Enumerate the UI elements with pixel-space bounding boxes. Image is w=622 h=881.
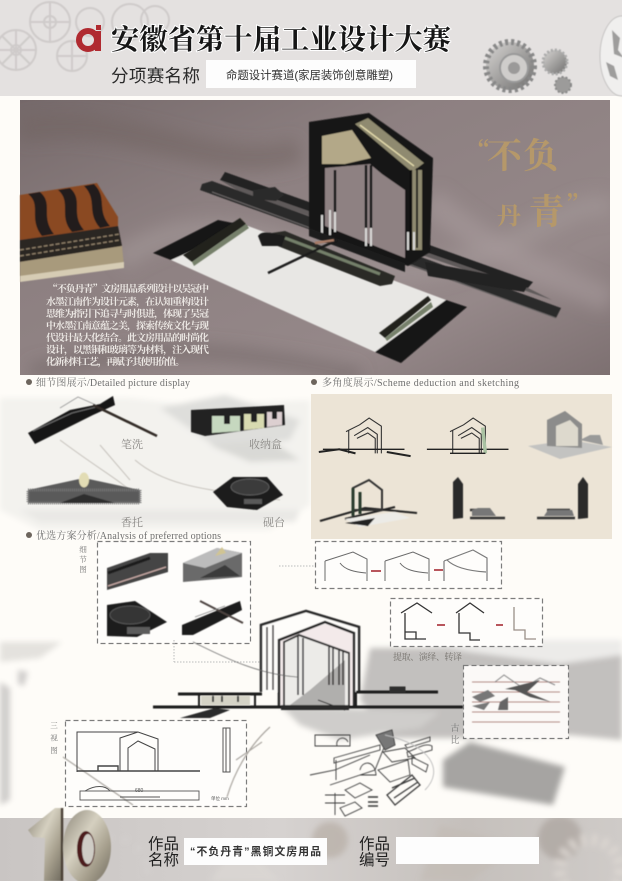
plum branch decoration xyxy=(63,727,270,805)
view 6 side xyxy=(537,477,588,519)
product description text: 代设计最大化结合。此文房用品的时尚化 xyxy=(46,330,209,344)
label: storage box: 收纳盒 xyxy=(249,436,282,452)
view 3 perspective xyxy=(528,411,612,459)
logo xyxy=(79,25,101,51)
label: detail views: 节 xyxy=(79,554,87,565)
roof sketch 2 xyxy=(385,552,429,581)
hand sketches xyxy=(310,730,434,816)
unit note: 单位 mm xyxy=(211,795,229,802)
panel: detail pictures xyxy=(0,395,310,530)
decorative gears top right xyxy=(486,16,622,96)
product: storage box xyxy=(191,405,285,436)
arrow 2 xyxy=(434,569,443,571)
heading: preferred options: 优选方案分析/Analysis of preferred options xyxy=(36,529,221,542)
roof sketch 3 xyxy=(444,550,487,581)
label: three views: 三 xyxy=(50,720,58,731)
gold slogan: “ xyxy=(466,132,490,167)
product description text: 思维为指引下追寻与时俱进，体现了吴冠 xyxy=(46,306,209,320)
desk mat and paper xyxy=(153,220,467,363)
panel: hero product photo xyxy=(20,100,610,375)
profile sketches dashed box xyxy=(390,598,542,646)
detail views dashed box xyxy=(98,542,250,644)
label: detail views: 图 xyxy=(79,564,87,575)
paperweights xyxy=(183,218,433,341)
label: three views: 图 xyxy=(50,745,58,756)
product: inkstone xyxy=(213,477,283,510)
central elevation drawing xyxy=(153,611,463,718)
panel: ink wash lower background xyxy=(0,640,622,805)
label: proportion: 古 xyxy=(450,721,460,734)
label: three views: 视 xyxy=(50,732,58,744)
brush holder arch xyxy=(309,113,433,272)
work name box xyxy=(184,838,327,865)
gold slogan: 青 xyxy=(529,185,564,235)
subtitle value box xyxy=(206,60,416,88)
proportion sketch art xyxy=(472,675,560,722)
gold slogan xyxy=(466,129,590,235)
back bars xyxy=(200,172,561,318)
label: detail views: 细 xyxy=(79,544,87,555)
books stack xyxy=(20,183,124,282)
view 5 side xyxy=(453,477,505,519)
gold slogan: 丹 xyxy=(497,196,521,231)
pen tray and brush xyxy=(258,231,395,286)
product description text xyxy=(46,281,209,368)
heading: detail pictures: 细节图展示/Detailed picture display xyxy=(36,376,190,389)
panel: header band xyxy=(0,0,622,96)
detail crop 1 xyxy=(107,553,168,590)
profile 2 xyxy=(456,603,484,640)
label: work number: 编号 xyxy=(359,851,390,869)
work number box xyxy=(396,837,539,864)
roof sketches dashed box xyxy=(316,542,502,588)
proportion sketch dashed box xyxy=(464,666,568,738)
label: work number: 作品 xyxy=(359,835,390,853)
view 4 perspective xyxy=(320,480,417,527)
profile 3 xyxy=(514,607,536,639)
title: 安徽省第十届工业设计大赛 xyxy=(111,18,454,58)
view 1 front xyxy=(319,418,411,456)
gold slogan: ” xyxy=(566,186,590,221)
subtitle label: 分项赛名称 xyxy=(111,66,200,86)
work name box: “不负丹青”黑铜文房用品 xyxy=(190,844,321,858)
label: work name: 名称 xyxy=(148,851,179,869)
arrow 1 xyxy=(371,570,381,572)
gold slogan: 不负 xyxy=(487,129,559,179)
decorative footer gears xyxy=(83,816,620,881)
arrow 4 xyxy=(496,624,503,626)
product: incense holder xyxy=(28,472,140,503)
ink wash background xyxy=(0,395,310,530)
label: inkstone: 砚台 xyxy=(263,514,285,530)
product description text: 中水墨江南意蕴之美，探索传统文化与现 xyxy=(46,318,209,332)
panel: footer band xyxy=(0,808,622,881)
decorative gears top left xyxy=(0,2,169,71)
product: pen wash xyxy=(28,396,157,444)
product description text: “不负丹青”文房用品系列设计以吴冠中 xyxy=(48,281,209,295)
label: proportion: 比 xyxy=(450,733,460,746)
view 2 front xyxy=(427,418,508,453)
product description text: 设计，以黑铜和玻璃等为材料，注入现代 xyxy=(46,342,209,356)
dimension 680: 680 xyxy=(135,788,144,794)
front elevation xyxy=(77,732,200,772)
profile 1 xyxy=(401,603,432,639)
panel: multi-angle views xyxy=(311,394,612,539)
subtitle value box: 命题设计赛道(家居装饰创意雕塑) xyxy=(226,68,393,82)
detail crop 2 xyxy=(183,547,242,582)
anniversary numeral 10 xyxy=(28,808,111,881)
roof sketch 1 xyxy=(325,552,367,581)
label: extraction: 提取、演绎、转译 xyxy=(393,650,462,663)
label: work name: 作品 xyxy=(148,835,179,853)
heading: multi-angle views: 多角度展示/Scheme deduction and sketching xyxy=(322,376,519,389)
detail crop 3 xyxy=(107,601,167,637)
detail crop 4 xyxy=(182,601,243,635)
arrow 3 xyxy=(437,624,445,626)
dotted leader box xyxy=(174,566,420,662)
label: pen wash: 笔洗 xyxy=(121,436,143,452)
product description text: 化新材料工艺，再赋予其使用价值。 xyxy=(46,354,185,368)
side view xyxy=(223,728,230,772)
product description text: 水墨江南作为设计元素，在认知重构设计 xyxy=(46,294,209,308)
three-view dashed box xyxy=(63,720,270,806)
top view xyxy=(80,786,199,800)
label: incense holder: 香托 xyxy=(121,514,143,530)
